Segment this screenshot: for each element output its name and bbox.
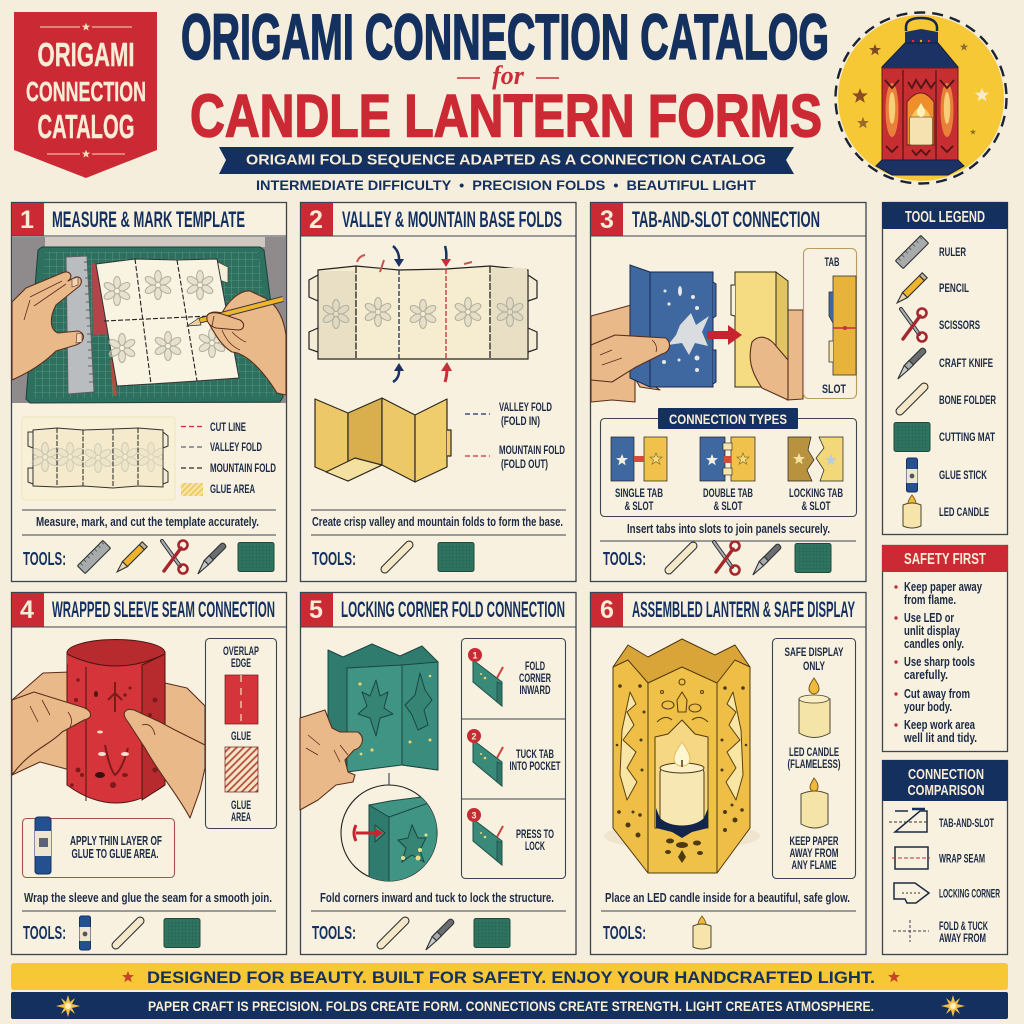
- fold legend: VALLEY FOLD: [499, 400, 552, 414]
- header banner: red pennant: CONNECTION: [26, 76, 146, 107]
- glue instruction: APPLY THIN LAYER OF: [70, 834, 162, 848]
- comparison: wrap seam: [892, 847, 985, 869]
- panel 6: assembled lantern and safe display: [590, 592, 866, 954]
- panel 2: valley and mountain base folds: [300, 202, 576, 582]
- double tab and slot: [700, 437, 755, 513]
- double tab and slot: DOUBLE TAB: [703, 486, 753, 500]
- line type legend: GLUE AREA: [210, 482, 255, 496]
- glue instruction: GLUE TO GLUE AREA.: [72, 847, 158, 861]
- illustration: hands marking the template on a cutting mat: [12, 237, 286, 403]
- icon: LED candle: [799, 678, 830, 738]
- step 3: 3: [471, 810, 477, 820]
- icon: right hand: [207, 291, 286, 395]
- line type legend: CUT LINE: [210, 420, 246, 434]
- panel 1: measure and mark template: 1: [20, 206, 34, 234]
- title: CANDLE LANTERN FORMS: [190, 82, 822, 150]
- panel 3: tab-and-slot connection: 3: [600, 206, 614, 234]
- header banner: red pennant: [14, 12, 157, 178]
- step 2: [467, 729, 561, 786]
- step 3: PRESS TO: [516, 827, 554, 841]
- step 2: INTO POCKET: [510, 759, 561, 773]
- comparison: fold and tuck: AWAY FROM: [939, 931, 986, 945]
- panel: connection comparison: [882, 760, 1008, 954]
- icon: left hand: [12, 272, 83, 380]
- tools row 5: [312, 915, 510, 951]
- comparison: fold and tuck: [893, 919, 988, 945]
- arrows: fold direction: [357, 246, 472, 382]
- panel: safety first: from flame.: [904, 592, 956, 607]
- step 1: INWARD: [520, 683, 551, 697]
- panel 4: wrapped sleeve seam connection: [12, 592, 286, 954]
- panel: safety first: Use sharp tools: [904, 654, 975, 669]
- panel: safety first: candles only.: [904, 636, 964, 651]
- footer: yellow slogan banner: [11, 963, 1008, 990]
- subtitle ribbon: ORIGAMI FOLD SEQUENCE ADAPTED AS A CONNECTION CATALOG: [246, 152, 766, 168]
- heading 5: LOCKING CORNER FOLD CONNECTION: [341, 597, 565, 622]
- heading 4: WRAPPED SLEEVE SEAM CONNECTION: [52, 597, 275, 622]
- panel: safety first: Use LED or: [904, 610, 954, 625]
- caption 5: Fold corners inward and tuck to lock the structure.: [320, 891, 554, 905]
- comparison: locking corner: [894, 883, 1000, 903]
- inset: tab and slot detail: TAB: [824, 255, 840, 269]
- tools row 1: [23, 540, 274, 575]
- header banner: red pennant: CATALOG: [38, 108, 134, 145]
- caption 1: Measure, mark, and cut the template accurately.: [36, 515, 259, 529]
- step 2: TUCK TAB: [516, 747, 554, 761]
- tagline: INTERMEDIATE DIFFICULTY • PRECISION FOLDS • BEAUTIFUL LIGHT: [256, 177, 756, 193]
- icon: fingers over pencil: [207, 313, 246, 350]
- line type legend: [181, 420, 276, 496]
- inset: overlap and glue detail: EDGE: [231, 656, 251, 670]
- step 2: 2: [471, 732, 477, 742]
- connection types box: [600, 408, 856, 516]
- inset: tab and slot detail: SLOT: [822, 382, 847, 396]
- panel: connection comparison: COMPARISON: [908, 783, 984, 799]
- icon: pencil: [187, 299, 283, 326]
- panel: safety first: SAFETY FIRST: [904, 551, 986, 568]
- panel: safety first: unlit display: [904, 623, 961, 638]
- illustration: teal lantern form held by hand: [300, 644, 438, 810]
- caption 3: Insert tabs into slots to join panels securely.: [627, 522, 830, 536]
- inset: overlap and glue detail: AREA: [231, 810, 251, 824]
- inset: safe display only: AWAY FROM: [790, 846, 838, 860]
- inset: tab and slot detail: [804, 248, 856, 398]
- panel 2: valley and mountain base folds: 2: [309, 206, 323, 234]
- double tab and slot: & SLOT: [714, 499, 743, 513]
- tools row 6: [603, 916, 711, 949]
- folded yellow base: [315, 398, 451, 482]
- panel: safety first: your body.: [904, 699, 952, 714]
- panel: tool legend: GLUE STICK: [939, 468, 987, 482]
- panel 1: measure and mark template: [12, 202, 286, 582]
- step 1: FOLD: [525, 659, 545, 673]
- panel: safety first: well lit and tidy.: [903, 730, 977, 745]
- panel: tool legend: CRAFT KNIFE: [939, 356, 993, 370]
- steps box: [462, 638, 566, 878]
- footer: yellow slogan banner: DESIGNED FOR BEAUTY. BUILT FOR SAFETY. ENJOY YOUR HANDCRAFTED LIGHT.: [147, 969, 875, 987]
- illustration: hands wrapping a red sleeve: [12, 640, 205, 818]
- tools row 6: TOOLS:: [603, 922, 646, 943]
- panel: connection comparison: CONNECTION: [908, 767, 984, 783]
- lantern emblem: [836, 12, 1006, 184]
- inset: overlap and glue detail: GLUE: [231, 798, 251, 812]
- footer: navy motto banner: [11, 992, 1008, 1019]
- panel: safety first: Keep work area: [904, 717, 976, 732]
- locking tab and slot: LOCKING TAB: [789, 486, 843, 500]
- single tab and slot: SINGLE TAB: [615, 486, 663, 500]
- caption 2: Create crisp valley and mountain folds to form the base.: [312, 515, 563, 529]
- step 1: [468, 648, 551, 706]
- step 1: CORNER: [519, 671, 551, 685]
- comparison: tab and slot: [889, 809, 994, 832]
- panel: safety first: Keep paper away: [904, 579, 983, 594]
- panel: safety first: Cut away from: [904, 686, 970, 701]
- header banner: red pennant: ORIGAMI: [38, 36, 134, 73]
- inset: overlap and glue detail: GLUE: [231, 729, 251, 743]
- fold legend: (FOLD OUT): [501, 457, 548, 471]
- panel: safety first: [882, 545, 1008, 752]
- panel: tool legend: [882, 202, 1008, 534]
- fold legend: [465, 400, 565, 471]
- comparison: fold and tuck: FOLD & TUCK: [939, 919, 988, 933]
- panel: tool legend: PENCIL: [939, 281, 969, 295]
- caption 4: Wrap the sleeve and glue the seam for a smooth join.: [24, 891, 272, 905]
- tools row 5: TOOLS:: [312, 922, 356, 943]
- fold legend: (FOLD IN): [501, 414, 540, 428]
- illustration: hands joining blue and yellow panels: [591, 265, 803, 402]
- inset: safe display only: [772, 638, 856, 878]
- step 1: 1: [472, 650, 478, 660]
- glue instruction: [22, 817, 174, 878]
- locking tab and slot: & SLOT: [802, 499, 831, 513]
- tools row 4: [23, 915, 200, 951]
- inset: safe display only: KEEP PAPER: [790, 834, 839, 848]
- inset: safe display only: ANY FLAME: [792, 858, 836, 872]
- panel: tool legend: LED CANDLE: [939, 505, 989, 519]
- step 3: LOCK: [525, 839, 545, 853]
- icon: holding hand: [300, 710, 362, 810]
- tools row 3: [603, 540, 831, 576]
- single tab and slot: [611, 437, 667, 513]
- panel: tool legend: BONE FOLDER: [939, 393, 996, 407]
- caption 6: Place an LED candle inside for a beautiful, safe glow.: [605, 891, 850, 905]
- panel: tool legend: RULER: [939, 245, 966, 259]
- panel 3: tab-and-slot connection: [590, 202, 866, 582]
- heading 3: TAB-AND-SLOT CONNECTION: [632, 207, 820, 232]
- panel: safety first: carefully.: [904, 667, 948, 682]
- panel 5: locking corner fold connection: [300, 592, 576, 954]
- tools row 2: [312, 539, 474, 575]
- connection types box: CONNECTION TYPES: [669, 412, 787, 427]
- footer: navy motto banner: PAPER CRAFT IS PRECISION. FOLDS CREATE FORM. CONNECTIONS CREATE STRENGTH. LIGHT CREATES ATMOSPHERE.: [148, 999, 874, 1014]
- inset: safe display only: LED CANDLE: [789, 745, 839, 759]
- illustration: glowing yellow lantern: [604, 639, 760, 873]
- inset: safe display only: ONLY: [803, 659, 825, 673]
- panel 5: locking corner fold connection: 5: [309, 596, 323, 624]
- tools row 1: TOOLS:: [23, 548, 66, 569]
- flat fold template: [309, 246, 537, 382]
- title: [181, 1, 829, 150]
- panel: tool legend: SCISSORS: [939, 318, 980, 332]
- panel 6: assembled lantern and safe display: 6: [600, 596, 614, 624]
- tools row 4: TOOLS:: [23, 922, 66, 943]
- locking tab and slot: [788, 437, 843, 513]
- tools row 2: TOOLS:: [312, 548, 356, 569]
- fold legend: MOUNTAIN FOLD: [499, 443, 565, 457]
- title: for: [492, 61, 525, 90]
- single tab and slot: & SLOT: [624, 499, 654, 513]
- inset: overlap and glue detail: OVERLAP: [223, 644, 259, 658]
- line type legend: MOUNTAIN FOLD: [210, 461, 276, 475]
- panel: tool legend: TOOL LEGEND: [905, 209, 985, 226]
- subtitle ribbon: [219, 147, 794, 174]
- comparison: wrap seam: WRAP SEAM: [939, 852, 985, 866]
- heading 2: VALLEY & MOUNTAIN BASE FOLDS: [342, 207, 562, 232]
- step 3: [467, 808, 554, 865]
- icon: second candle: [801, 778, 828, 828]
- heading 1: MEASURE & MARK TEMPLATE: [52, 207, 245, 232]
- panel 4: wrapped sleeve seam connection: 4: [20, 596, 34, 624]
- inset: overlap and glue detail: [206, 638, 276, 828]
- zoom circle detail: [341, 773, 437, 885]
- template diagram: [22, 417, 175, 500]
- line type legend: VALLEY FOLD: [210, 440, 262, 454]
- panel: tool legend: CUTTING MAT: [939, 430, 995, 444]
- inset: safe display only: SAFE DISPLAY: [784, 645, 844, 659]
- tools row 3: TOOLS:: [603, 548, 646, 569]
- inset: safe display only: (FLAMELESS): [788, 757, 840, 771]
